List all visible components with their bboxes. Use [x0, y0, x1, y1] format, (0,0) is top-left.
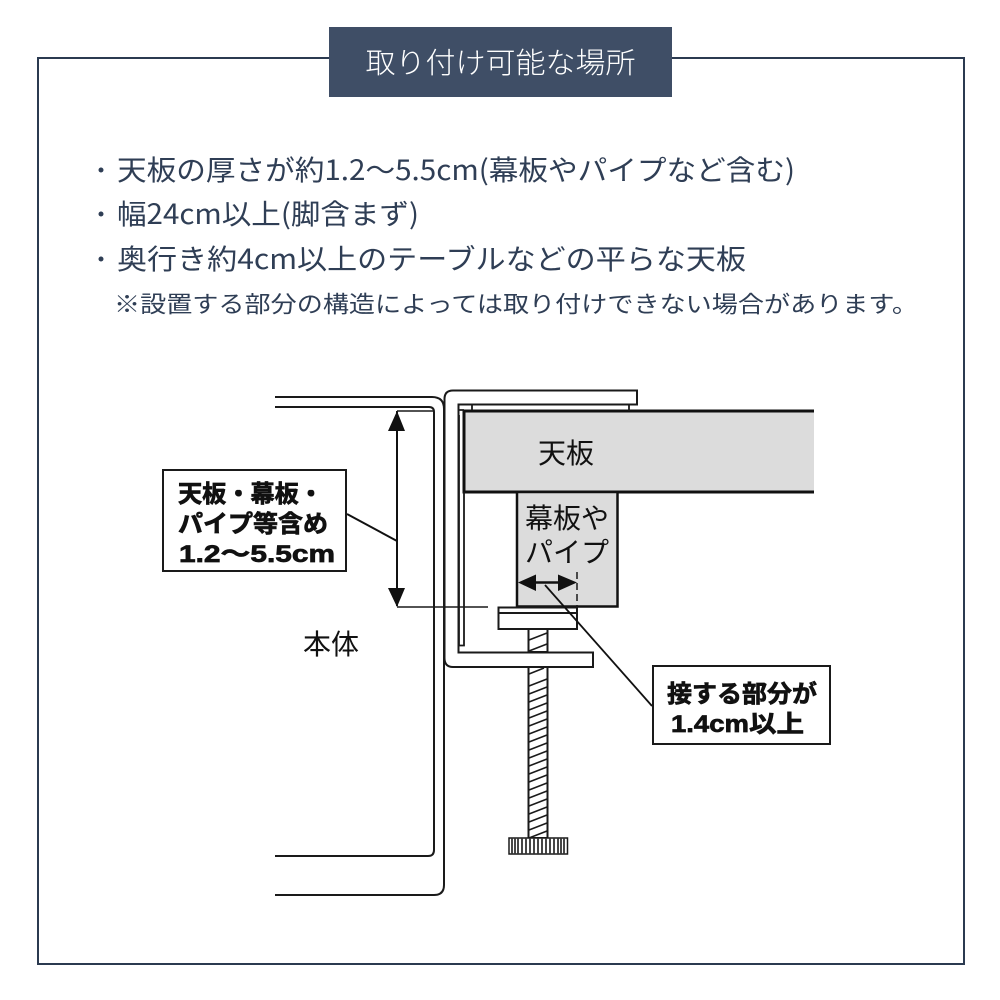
table top board	[464, 411, 814, 492]
callout: contact width: 接する部分が	[667, 680, 817, 708]
callout: thickness range	[163, 470, 346, 571]
text block: conditions: 天板の厚さが約1.2～5.5cm(幕板やパイプなど含む)	[117, 149, 795, 189]
table top outline	[464, 411, 814, 492]
dimension arrow: thickness	[388, 411, 488, 607]
label: curtain board or pipe	[525, 497, 609, 571]
text block: conditions: ※設置する部分の構造によっては取り付けできない場合があります。	[114, 285, 918, 319]
label: curtain board or pipe: 幕板や	[525, 497, 609, 537]
title: 取り付け可能な場所	[366, 40, 636, 82]
leader line: contact	[545, 585, 652, 706]
leader line: thickness	[347, 514, 397, 541]
callout: thickness range: パイプ等含め	[178, 511, 328, 538]
callout: contact width: 1.4cm以上	[671, 711, 804, 738]
label: curtain board or pipe: パイプ	[525, 531, 609, 571]
dashed contact line	[576, 572, 578, 607]
callout: thickness range: 天板・幕板・	[178, 481, 323, 508]
dimension arrow: contact width	[518, 574, 577, 591]
pressure plate	[498, 608, 577, 629]
label: main body: 本体	[303, 623, 359, 663]
main body outline	[275, 397, 444, 895]
callout: contact width	[653, 666, 830, 744]
title	[329, 27, 672, 97]
text block: conditions	[98, 149, 918, 319]
text block: conditions: 幅24cm以上(脚含まず)	[117, 193, 419, 233]
diagram: clamp	[275, 390, 814, 895]
label: table top: 天板	[538, 432, 594, 472]
text block: conditions: 奥行き約4cm以上のテーブルなどの平らな天板	[117, 238, 746, 278]
clamp bracket	[444, 390, 637, 667]
curtain board or pipe	[517, 492, 618, 606]
clamp inner pad	[459, 404, 629, 646]
knob	[509, 838, 568, 854]
callout: thickness range: 1.2～5.5cm	[179, 541, 335, 568]
screw shaft	[528, 629, 548, 838]
